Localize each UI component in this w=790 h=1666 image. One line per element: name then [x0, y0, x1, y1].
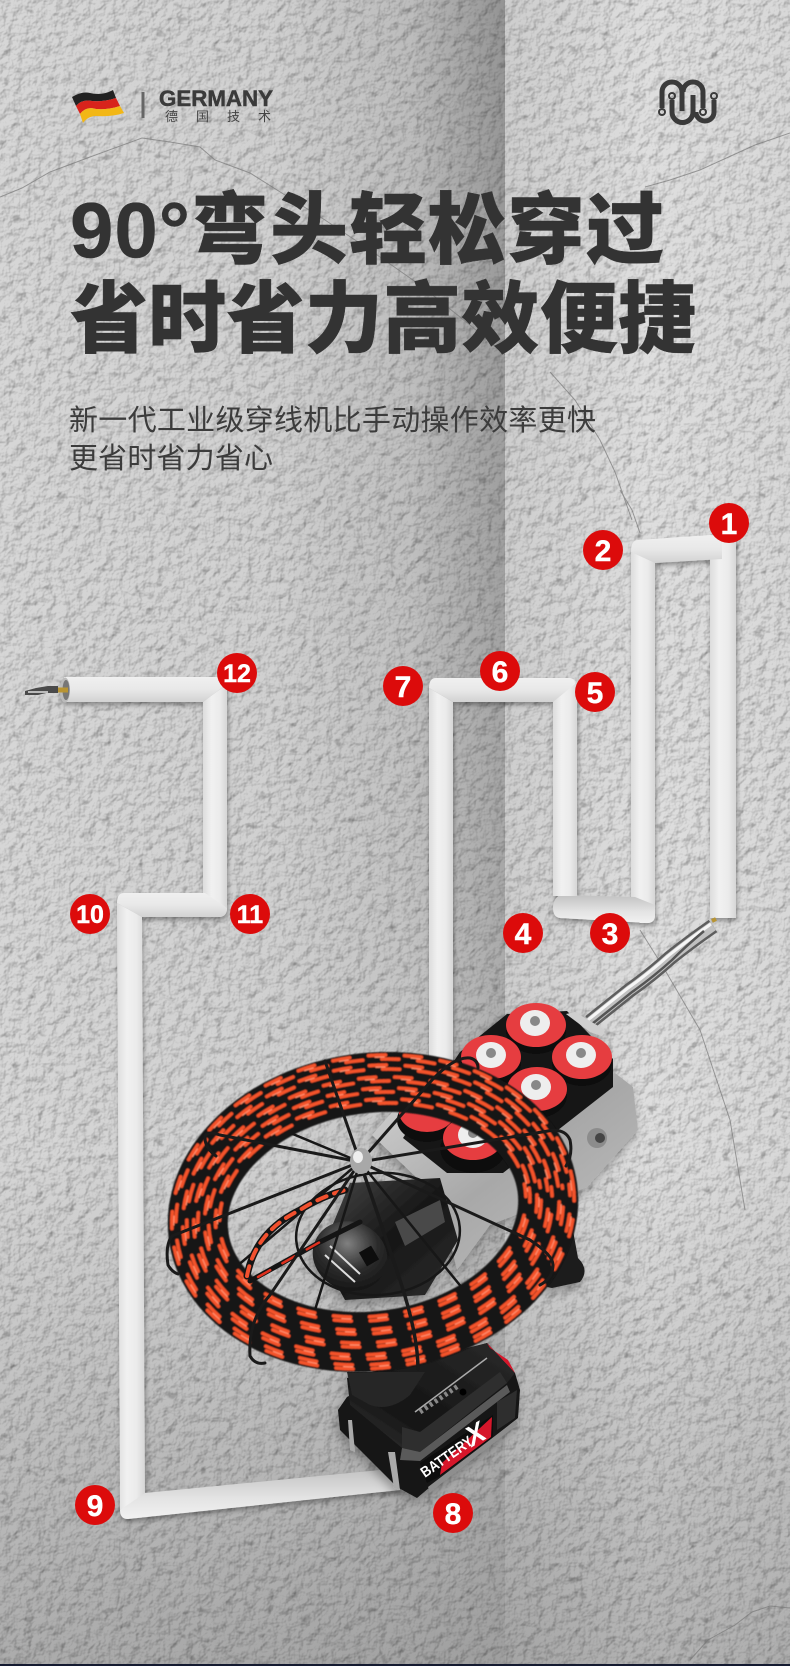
numbered marker 10: [70, 894, 110, 934]
icon: German flag: [72, 90, 124, 123]
icon: threading tip: [25, 686, 68, 695]
title: 90°弯头轻松穿过: [70, 186, 664, 274]
numbered marker 10: 10: [76, 901, 104, 929]
numbered marker 11: 11: [237, 901, 263, 929]
numbered marker 4: 4: [515, 918, 532, 951]
numbered marker 7: [383, 666, 423, 706]
white conduit tube: left section: [60, 677, 400, 1519]
wire spool frame with spokes: [167, 1058, 571, 1369]
numbered marker 5: [575, 672, 615, 712]
red pulley wheels: [397, 1003, 612, 1173]
numbered marker 8: 8: [445, 1498, 461, 1531]
subtitle text: [69, 404, 596, 475]
battery pack: X: [458, 1415, 493, 1453]
loose wire strand inside spool: [247, 1190, 360, 1281]
logo: Germany technology badge: [72, 86, 273, 124]
numbered marker 9: [75, 1485, 115, 1525]
numbered marker 1: [709, 503, 749, 543]
handle grip: [543, 1218, 585, 1288]
numbered marker 2: [583, 530, 623, 570]
numbered marker 11: [230, 894, 270, 934]
pulley block body: [403, 1011, 613, 1173]
spool hub: [350, 1148, 372, 1174]
numbered marker 2: 2: [595, 535, 611, 568]
bottom edge strip: [0, 1664, 790, 1666]
subtitle text: 更省时省力省心: [69, 442, 273, 475]
battery label: [420, 1415, 493, 1483]
title: [70, 186, 696, 363]
side screw: [587, 1128, 607, 1148]
battery lid: [347, 1343, 515, 1452]
numbered marker 3: 3: [602, 918, 618, 951]
numbered marker 1: 1: [721, 508, 737, 541]
battery pack: BATTERY: [418, 1433, 476, 1481]
subtitle text: 新一代工业级穿线机比手动操作效率更快: [69, 404, 596, 437]
numbered marker 8: [433, 1493, 473, 1533]
numbered marker 12: 12: [223, 660, 251, 688]
rope highlights: [154, 1032, 592, 1392]
twisted rope strands: [151, 1029, 595, 1395]
metal clamp: [566, 1012, 605, 1036]
numbered marker 5: 5: [587, 677, 603, 710]
numbered marker 4: [503, 913, 543, 953]
guide rod: [588, 919, 716, 1024]
numbered marker 7: 7: [395, 671, 411, 704]
logo: Germany technology badge: 德国技术: [165, 109, 271, 124]
inner wire frame behind rope: [230, 1112, 480, 1310]
motor housing: [301, 1178, 458, 1303]
numbered marker 3: [590, 913, 630, 953]
logo: Germany technology badge: GERMANY: [159, 86, 273, 111]
threading machine with pulley block: [301, 1003, 638, 1498]
numbered marker 6: [480, 651, 520, 691]
metal base plate: [372, 1073, 638, 1270]
numbered marker 6: 6: [492, 656, 508, 689]
icon: brand logo: [659, 82, 717, 122]
spool: twisted red and black pull wire: [151, 1029, 595, 1395]
numbered marker 12: [217, 653, 257, 693]
white conduit tube: right section: [429, 535, 736, 1250]
neck: [347, 1372, 425, 1407]
numbered marker 9: 9: [87, 1490, 103, 1523]
battery base: [338, 1343, 520, 1498]
title: 省时省力高效便捷: [70, 275, 696, 363]
battery pack: [338, 1343, 520, 1498]
